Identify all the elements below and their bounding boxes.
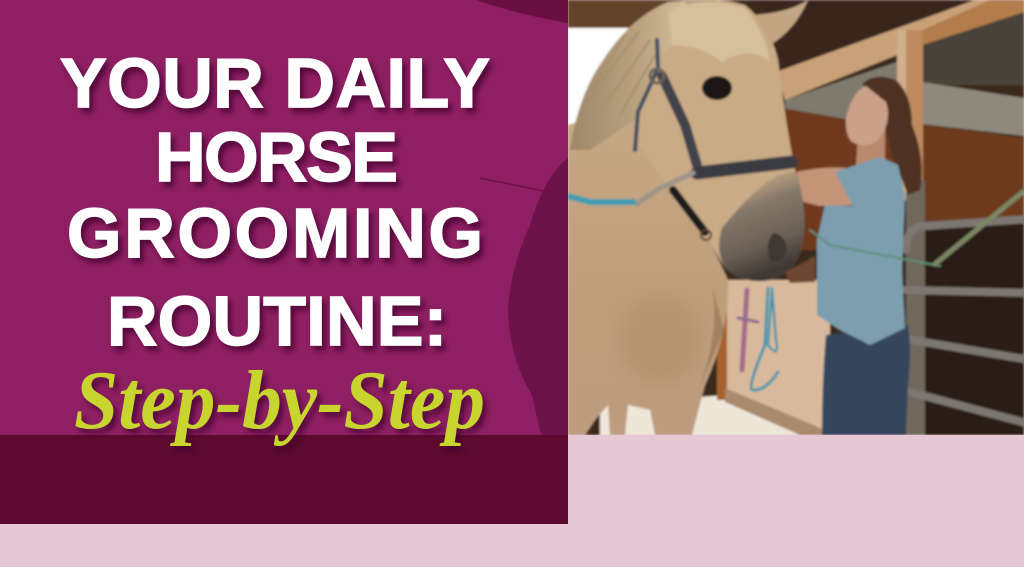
title (60, 44, 490, 360)
teal lead rope (568, 196, 636, 202)
horse right ear (755, 0, 808, 45)
neck (856, 125, 885, 165)
horse forelock (668, 2, 770, 62)
horse body (568, 100, 728, 435)
woman (785, 77, 922, 435)
horse head (642, 0, 797, 268)
halter (635, 40, 792, 240)
green lead rope (810, 186, 1024, 266)
wooden roof beam and post (776, 0, 1024, 435)
hanging lead ropes (738, 288, 778, 390)
title: YOUR DAILY (60, 44, 490, 122)
lead clip (635, 172, 695, 205)
dark band (0, 435, 568, 524)
dark corner shape (476, 0, 568, 23)
purple title panel (0, 0, 568, 435)
horse nostril (768, 233, 787, 262)
horse eye (702, 76, 732, 100)
horse mane (570, 0, 695, 150)
horse muzzle (719, 172, 805, 281)
face (846, 86, 888, 145)
photo: woman grooming a horse in a barn (568, 0, 1024, 435)
title: GROOMING (67, 194, 483, 272)
title: HORSE (155, 118, 398, 196)
subtitle: Step-by-Step: Step-by-Step (74, 354, 485, 447)
barn background (568, 0, 1024, 435)
metal stall gate rails (906, 219, 1024, 424)
jeans (822, 325, 910, 435)
horse silhouette in panel (508, 158, 568, 435)
thin lead line (480, 178, 568, 196)
horse left ear (684, 0, 715, 5)
t-shirt (817, 157, 905, 345)
title: ROUTINE: (107, 282, 447, 360)
forearm (785, 256, 815, 283)
horse shading (628, 293, 724, 378)
arm (796, 168, 858, 206)
hair (862, 77, 922, 195)
